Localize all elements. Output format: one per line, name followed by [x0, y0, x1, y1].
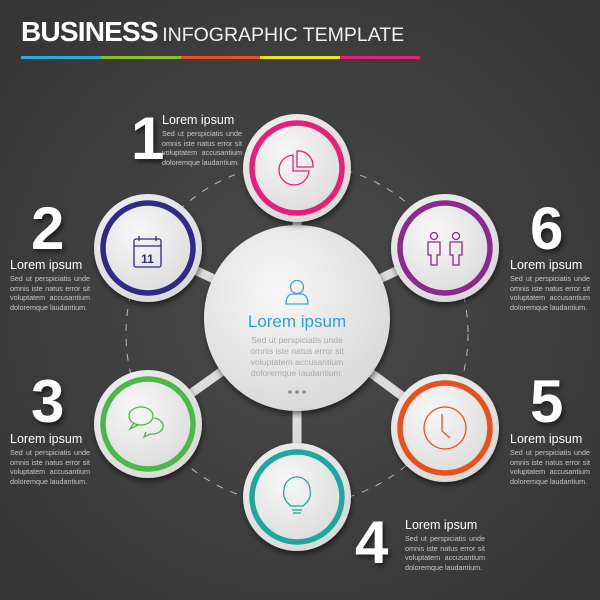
text block 4: Sed ut perspiciatis unde omnis iste natus error sit voluptatem accusantium doloremque laudantium. [405, 534, 485, 572]
text block 6: Sed ut perspiciatis unde omnis iste natus error sit voluptatem accusantium doloremque laudantium. [510, 274, 590, 312]
number 2: 2 [31, 195, 64, 262]
circle 2: calendar [94, 194, 202, 302]
number 1: 1 [131, 105, 164, 172]
number 4: 4 [355, 509, 388, 576]
text block 5: Lorem ipsum [510, 432, 582, 446]
center circle: omnis iste natus error sit [250, 346, 344, 356]
center circle: doloremque laudantium. [251, 368, 343, 378]
text block 6: Lorem ipsum [510, 258, 582, 272]
number 3: 3 [31, 368, 64, 435]
center circle: Lorem ipsum [248, 312, 346, 331]
circle 1: pie chart [243, 114, 351, 222]
text block 4: Lorem ipsum [405, 518, 477, 532]
circle 4: light bulb [243, 443, 351, 551]
text block 1: Sed ut perspiciatis unde omnis iste natus error sit voluptatem accusantium doloremque laudantium. [162, 129, 242, 166]
center circle: Sed ut perspiciatis unde [251, 335, 343, 345]
number 5: 5 [530, 368, 563, 435]
circle 2: calendar: 11 [141, 252, 154, 266]
icon: person [286, 280, 308, 304]
circle 3: chat [94, 370, 202, 478]
circle 5: clock [391, 374, 499, 482]
center circle: voluptatem accusantium [251, 357, 343, 367]
text block 3: Lorem ipsum [10, 432, 82, 446]
center circle [204, 225, 390, 411]
number 6: 6 [530, 195, 563, 262]
text block 2: Sed ut perspiciatis unde omnis iste natus error sit voluptatem accusantium doloremque laudantium. [10, 274, 90, 312]
text block 5: Sed ut perspiciatis unde omnis iste natus error sit voluptatem accusantium doloremque laudantium. [510, 448, 590, 486]
title [21, 16, 420, 59]
text block 3: Sed ut perspiciatis unde omnis iste natus error sit voluptatem accusantium doloremque laudantium. [10, 448, 90, 486]
title: BUSINESS INFOGRAPHIC TEMPLATE [21, 16, 404, 47]
circle 6: people [391, 194, 499, 302]
text block 2: Lorem ipsum [10, 258, 82, 272]
text block 1: Lorem ipsum [162, 113, 234, 127]
